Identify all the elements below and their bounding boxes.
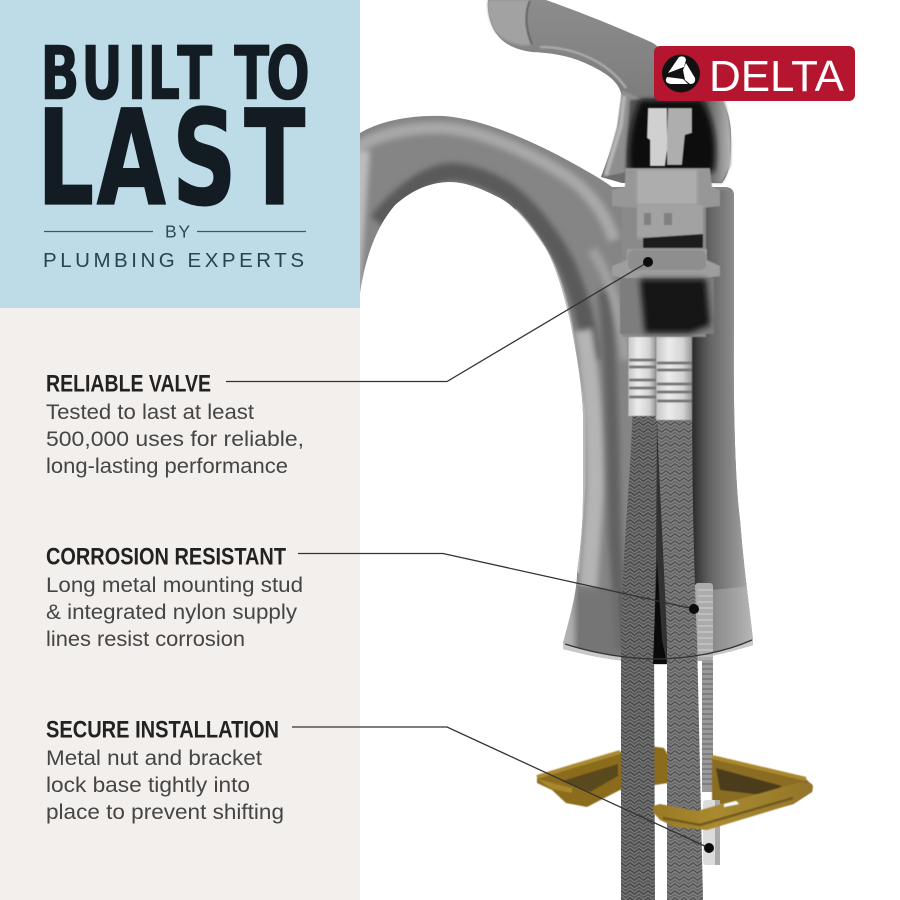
cutaway interior xyxy=(622,270,692,664)
text: corrosion resistant description: lines resist corrosion xyxy=(46,627,245,651)
icon: Delta triangle mark xyxy=(662,54,700,92)
base lip xyxy=(563,640,753,663)
text: corrosion resistant description: & integrated nylon supply xyxy=(46,600,297,624)
subtitle: by: BY xyxy=(165,222,190,242)
valve assembly xyxy=(612,168,720,337)
text: secure installation description xyxy=(46,746,284,824)
feature: secure installation xyxy=(46,716,284,824)
logo wordmark: DELTA xyxy=(709,52,845,101)
callout: secure installation leader xyxy=(292,727,714,853)
callout: reliable valve leader xyxy=(226,257,653,382)
callout: corrosion resistant leader xyxy=(298,554,699,614)
text: secure installation description: lock base tightly into xyxy=(46,773,250,797)
handle cavity xyxy=(629,100,716,172)
feature: reliable valve xyxy=(46,370,304,478)
text: secure installation description: Metal nut and bracket xyxy=(46,746,262,770)
text: reliable valve description xyxy=(46,400,304,478)
front bracket rim xyxy=(653,782,812,830)
title line: last: LAST xyxy=(37,81,305,236)
title xyxy=(37,32,310,236)
title line: built to: BUILT TO xyxy=(40,32,310,118)
text: secure installation description: place to prevent shifting xyxy=(46,800,284,824)
bracket tab xyxy=(703,800,720,865)
hose fitting: right xyxy=(656,335,692,420)
panel: features background xyxy=(0,308,360,900)
text: reliable valve description: 500,000 uses for reliable, xyxy=(46,427,304,451)
feature: corrosion resistant xyxy=(46,544,303,651)
text: corrosion resistant description xyxy=(46,573,303,651)
faucet illustration xyxy=(352,0,813,900)
heading: reliable valve: RELIABLE VALVE xyxy=(46,370,211,398)
heading: corrosion resistant: CORROSION RESISTANT xyxy=(46,544,286,570)
text: corrosion resistant description: Long metal mounting stud xyxy=(46,573,303,597)
mounting stud xyxy=(695,583,713,792)
dark gap between hoses xyxy=(653,560,667,664)
supply hose: right xyxy=(657,419,703,900)
base rim xyxy=(565,640,752,659)
hose fitting: left xyxy=(628,332,656,416)
supply hose: left xyxy=(621,415,657,900)
panel: title background xyxy=(0,0,360,308)
logo: Delta xyxy=(654,46,855,101)
spout and body shell xyxy=(352,100,760,670)
subtitle: plumbing experts: PLUMBING EXPERTS xyxy=(43,249,304,272)
heading: secure installation: SECURE INSTALLATION xyxy=(46,716,279,744)
faucet handle lever xyxy=(488,0,731,183)
text: reliable valve description: Tested to last at least xyxy=(46,400,254,424)
valve stem xyxy=(647,108,692,166)
text: reliable valve description: long-lasting performance xyxy=(46,454,288,478)
bracket back section xyxy=(537,746,813,815)
